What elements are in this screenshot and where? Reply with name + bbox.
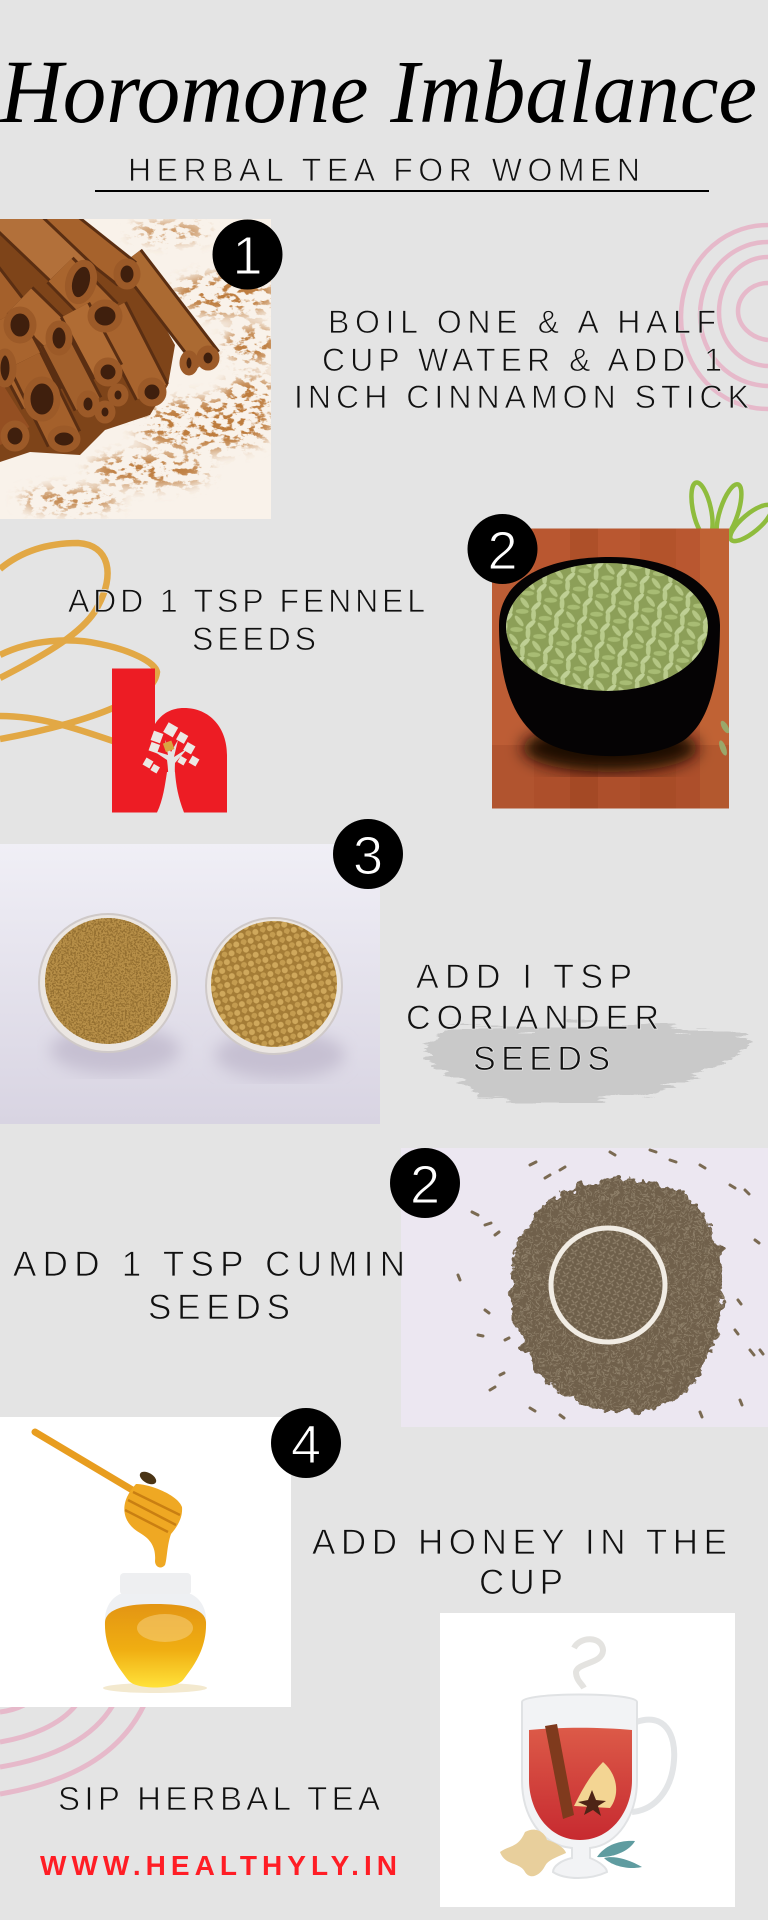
decoration: green leaves — [687, 481, 768, 547]
text: honey instruction: ADD HONEY IN THE — [312, 1523, 727, 1562]
badge: step 2 fennel: 2 — [487, 521, 518, 581]
text: sip herbal tea: SIP HERBAL TEA — [58, 1780, 380, 1817]
panel: step 2 fennel photo — [492, 528, 731, 809]
text: step 1 instruction — [294, 304, 749, 415]
badge: step 4 cumin: 2 — [410, 1155, 440, 1215]
text: step 2 instruction — [68, 583, 425, 657]
text: cumin instruction: ADD 1 TSP CUMIN — [13, 1245, 405, 1284]
text: website url: WWW.HEALTHYLY.IN — [40, 1850, 397, 1881]
text: honey instruction — [312, 1523, 727, 1602]
logo: red h with tree — [112, 668, 227, 812]
stray seeds — [719, 720, 729, 756]
subtitle underline — [95, 190, 709, 192]
bowl — [499, 557, 720, 756]
bowl shadows — [50, 1026, 180, 1074]
panel: herbal tea illustration — [440, 1613, 735, 1907]
panel: step 1 cinnamon photo — [0, 200, 280, 519]
leaves — [597, 1841, 642, 1868]
honey dipper stick — [35, 1432, 134, 1491]
text: cumin instruction: SEEDS — [148, 1288, 290, 1327]
bowl shadow — [522, 724, 698, 772]
cinnamon sticks — [0, 200, 208, 439]
fennel seeds — [506, 563, 708, 691]
text: step 1 instruction: CUP WATER & ADD 1 — [322, 342, 722, 378]
orange slice — [574, 1762, 616, 1808]
tea liquid — [529, 1728, 632, 1840]
dipper head and drip — [124, 1484, 182, 1568]
ginger — [500, 1830, 566, 1876]
decoration: gray brush stroke — [420, 1024, 750, 1102]
badge: step 3 — [333, 819, 403, 889]
white bowl — [551, 1228, 665, 1342]
decoration: pink arcs top right — [681, 225, 768, 409]
cinnamon powder — [20, 224, 280, 510]
panel: honey illustration — [0, 1417, 291, 1707]
badge: step 3: 3 — [353, 826, 383, 886]
text: step 1 instruction: BOIL ONE & A HALF — [328, 304, 716, 340]
tree mark — [143, 722, 199, 812]
cinnamon stick ends — [0, 261, 216, 449]
panel: step 4 cumin photo — [401, 1148, 768, 1427]
mug handle — [632, 1720, 674, 1812]
text: step 3 instruction: ADD I TSP — [416, 958, 632, 996]
bee — [138, 1469, 158, 1487]
cinnamon stick — [545, 1724, 574, 1819]
text: step 1 instruction: INCH CINNAMON STICK — [294, 379, 749, 415]
steam — [574, 1639, 603, 1688]
cumin pile — [511, 1178, 722, 1411]
text: step 3 instruction: SEEDS — [473, 1040, 610, 1078]
scattered seeds — [458, 1150, 763, 1418]
decoration: orange scribble — [0, 543, 157, 741]
bowl: coriander seeds — [206, 918, 342, 1054]
subtitle: HERBAL TEA FOR WOMEN — [128, 152, 640, 188]
badge: step 4 honey — [271, 1408, 341, 1478]
text: honey instruction: CUP — [479, 1563, 563, 1602]
text: step 3 instruction — [406, 958, 659, 1078]
badge: step 4 cumin — [390, 1148, 460, 1218]
text: cumin instruction — [13, 1245, 405, 1327]
star anise — [578, 1790, 606, 1816]
cinnamon cluster base — [0, 219, 175, 462]
title: Horomone Imbalance — [0, 43, 757, 142]
honey jar — [103, 1573, 207, 1693]
badge: step 1: 1 — [232, 226, 263, 286]
decoration: pink arcs bottom left — [0, 1705, 144, 1794]
text: step 3 instruction: CORIANDER — [406, 999, 659, 1037]
text: step 2 instruction: SEEDS — [192, 621, 316, 657]
badge: step 2 fennel — [468, 514, 538, 584]
badge: step 4 honey: 4 — [291, 1415, 321, 1475]
bowl: ground coriander — [39, 914, 177, 1052]
mug glass — [522, 1694, 637, 1878]
wood planks — [534, 528, 729, 808]
badge: step 1 — [212, 220, 282, 290]
text: step 2 instruction: ADD 1 TSP FENNEL — [68, 583, 425, 619]
panel: step 3 coriander photo — [0, 844, 380, 1124]
